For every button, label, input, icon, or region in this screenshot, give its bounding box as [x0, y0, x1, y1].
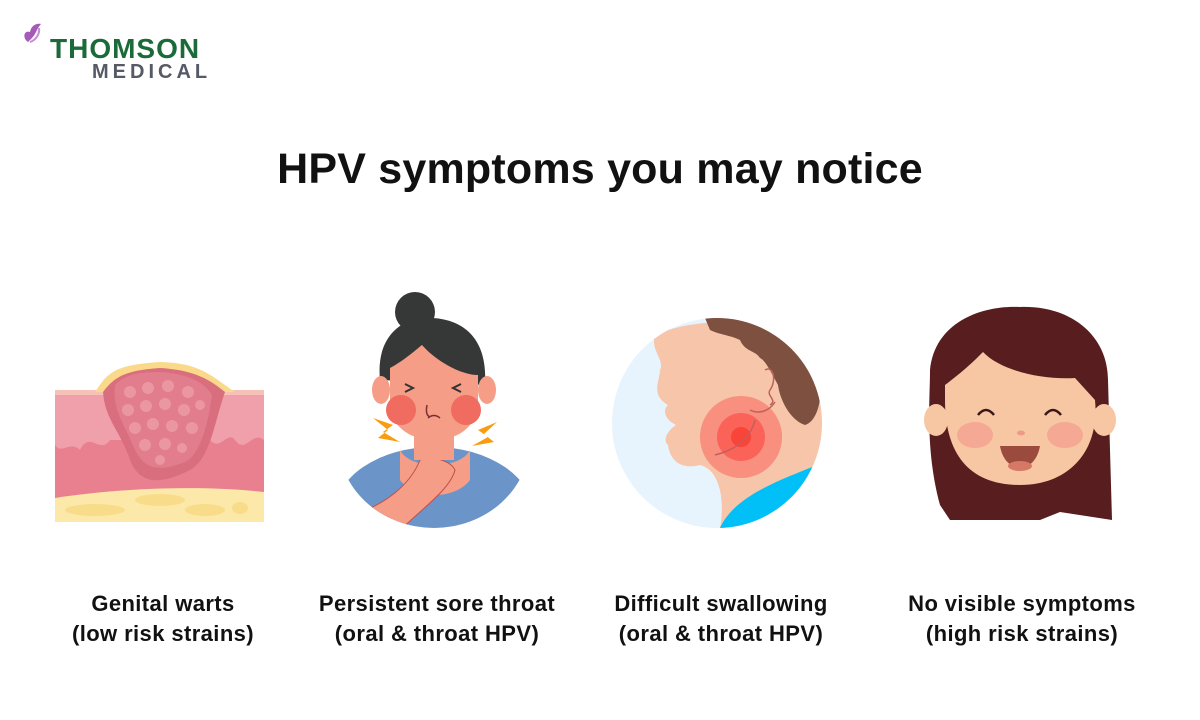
label: no visible symptoms: No visible symptoms: [908, 591, 1136, 616]
label: sore throat: Persistent sore throat: [319, 591, 555, 616]
label: no visible symptoms: (high risk strains): [926, 621, 1118, 646]
label: genital warts: Genital warts: [91, 591, 235, 616]
label: difficult swallowing: (oral & throat HPV): [619, 621, 823, 646]
title: HPV symptoms you may notice: [277, 145, 923, 193]
icon: smiling girl: [924, 307, 1116, 520]
label: difficult swallowing: Difficult swallowing: [614, 591, 828, 616]
label: sore throat: [319, 591, 555, 646]
label: sore throat: (oral & throat HPV): [335, 621, 539, 646]
logo text: THOMSON: [50, 33, 200, 64]
icon: genital warts skin cross-section: [55, 362, 264, 522]
logo: [24, 24, 211, 83]
label: no visible symptoms: [908, 591, 1136, 646]
label: difficult swallowing: [614, 591, 828, 646]
logo: MEDICAL: [92, 61, 211, 83]
icon: woman with sore throat: [348, 292, 520, 528]
label: genital warts: [72, 591, 254, 646]
icon: man difficult swallowing: [612, 315, 830, 528]
label: genital warts: (low risk strains): [72, 621, 254, 646]
illustrations: [55, 292, 1116, 528]
icon: butterfly: [24, 24, 41, 43]
